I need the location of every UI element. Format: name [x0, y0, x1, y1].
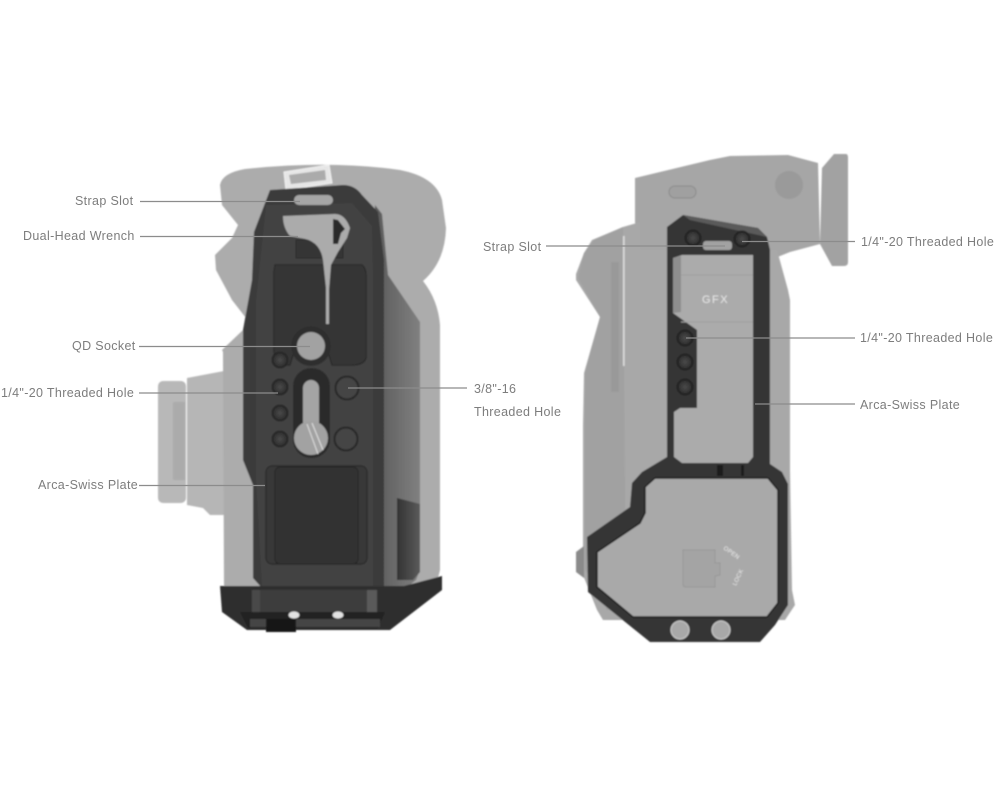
label: 1/4-20 threaded hole left: 1/4"-20 Threaded Hole	[1, 386, 134, 400]
strap slot	[294, 195, 333, 205]
base clamp	[220, 576, 442, 632]
top threaded holes	[686, 230, 750, 246]
camera top housing	[635, 155, 820, 258]
dial and button	[669, 171, 803, 199]
label: 1/4-20 threaded hole top right: 1/4"-20 Threaded Hole	[861, 235, 994, 249]
label: 1/4-20 threaded hole mid right: 1/4"-20 Threaded Hole	[860, 331, 993, 345]
bottom screws	[671, 621, 730, 639]
small threaded holes	[272, 352, 288, 446]
eyecup	[820, 154, 848, 266]
dial on the left of the grip	[576, 546, 584, 578]
battery door	[597, 478, 778, 617]
label: strap slot left: Strap Slot	[75, 194, 134, 208]
left camera body	[215, 165, 446, 586]
label: QD socket: QD Socket	[72, 339, 136, 353]
battery door: LOCK	[732, 568, 745, 587]
left camera with bottom plate	[158, 165, 446, 632]
callout lines	[139, 202, 855, 486]
camera body	[576, 222, 795, 620]
side threaded holes	[678, 330, 692, 394]
GFX logo: GFX	[702, 294, 729, 306]
strap slot right	[703, 241, 732, 250]
neck gap	[717, 465, 723, 476]
viewfinder of left camera	[158, 371, 224, 515]
keyhole slot and screw	[293, 368, 330, 458]
upper cutout showing camera side	[673, 255, 753, 463]
label: 3/8-16 threaded hole: 3/8"-16	[474, 382, 516, 396]
label: arca-swiss plate right: Arca-Swiss Plate	[860, 398, 960, 412]
side of plate	[370, 205, 420, 588]
recess	[256, 203, 373, 588]
dual-head wrench	[283, 214, 350, 324]
L-plate main body	[243, 185, 384, 588]
wrench recess and upper panels	[296, 240, 343, 258]
base screws	[288, 612, 344, 618]
right camera with L-bracket	[576, 154, 848, 642]
large threaded holes	[334, 376, 358, 450]
label: strap slot right: Strap Slot	[483, 240, 542, 254]
strap loop	[284, 165, 332, 190]
label: dual-head wrench: Dual-Head Wrench	[23, 229, 135, 243]
QD socket	[291, 326, 331, 366]
label: arca-swiss plate left: Arca-Swiss Plate	[38, 478, 138, 492]
battery door: OPEN	[722, 546, 740, 561]
L-bracket frame	[587, 215, 788, 642]
label: 3/8-16 threaded hole: Threaded Hole	[474, 405, 561, 419]
lower square panel	[266, 466, 367, 564]
